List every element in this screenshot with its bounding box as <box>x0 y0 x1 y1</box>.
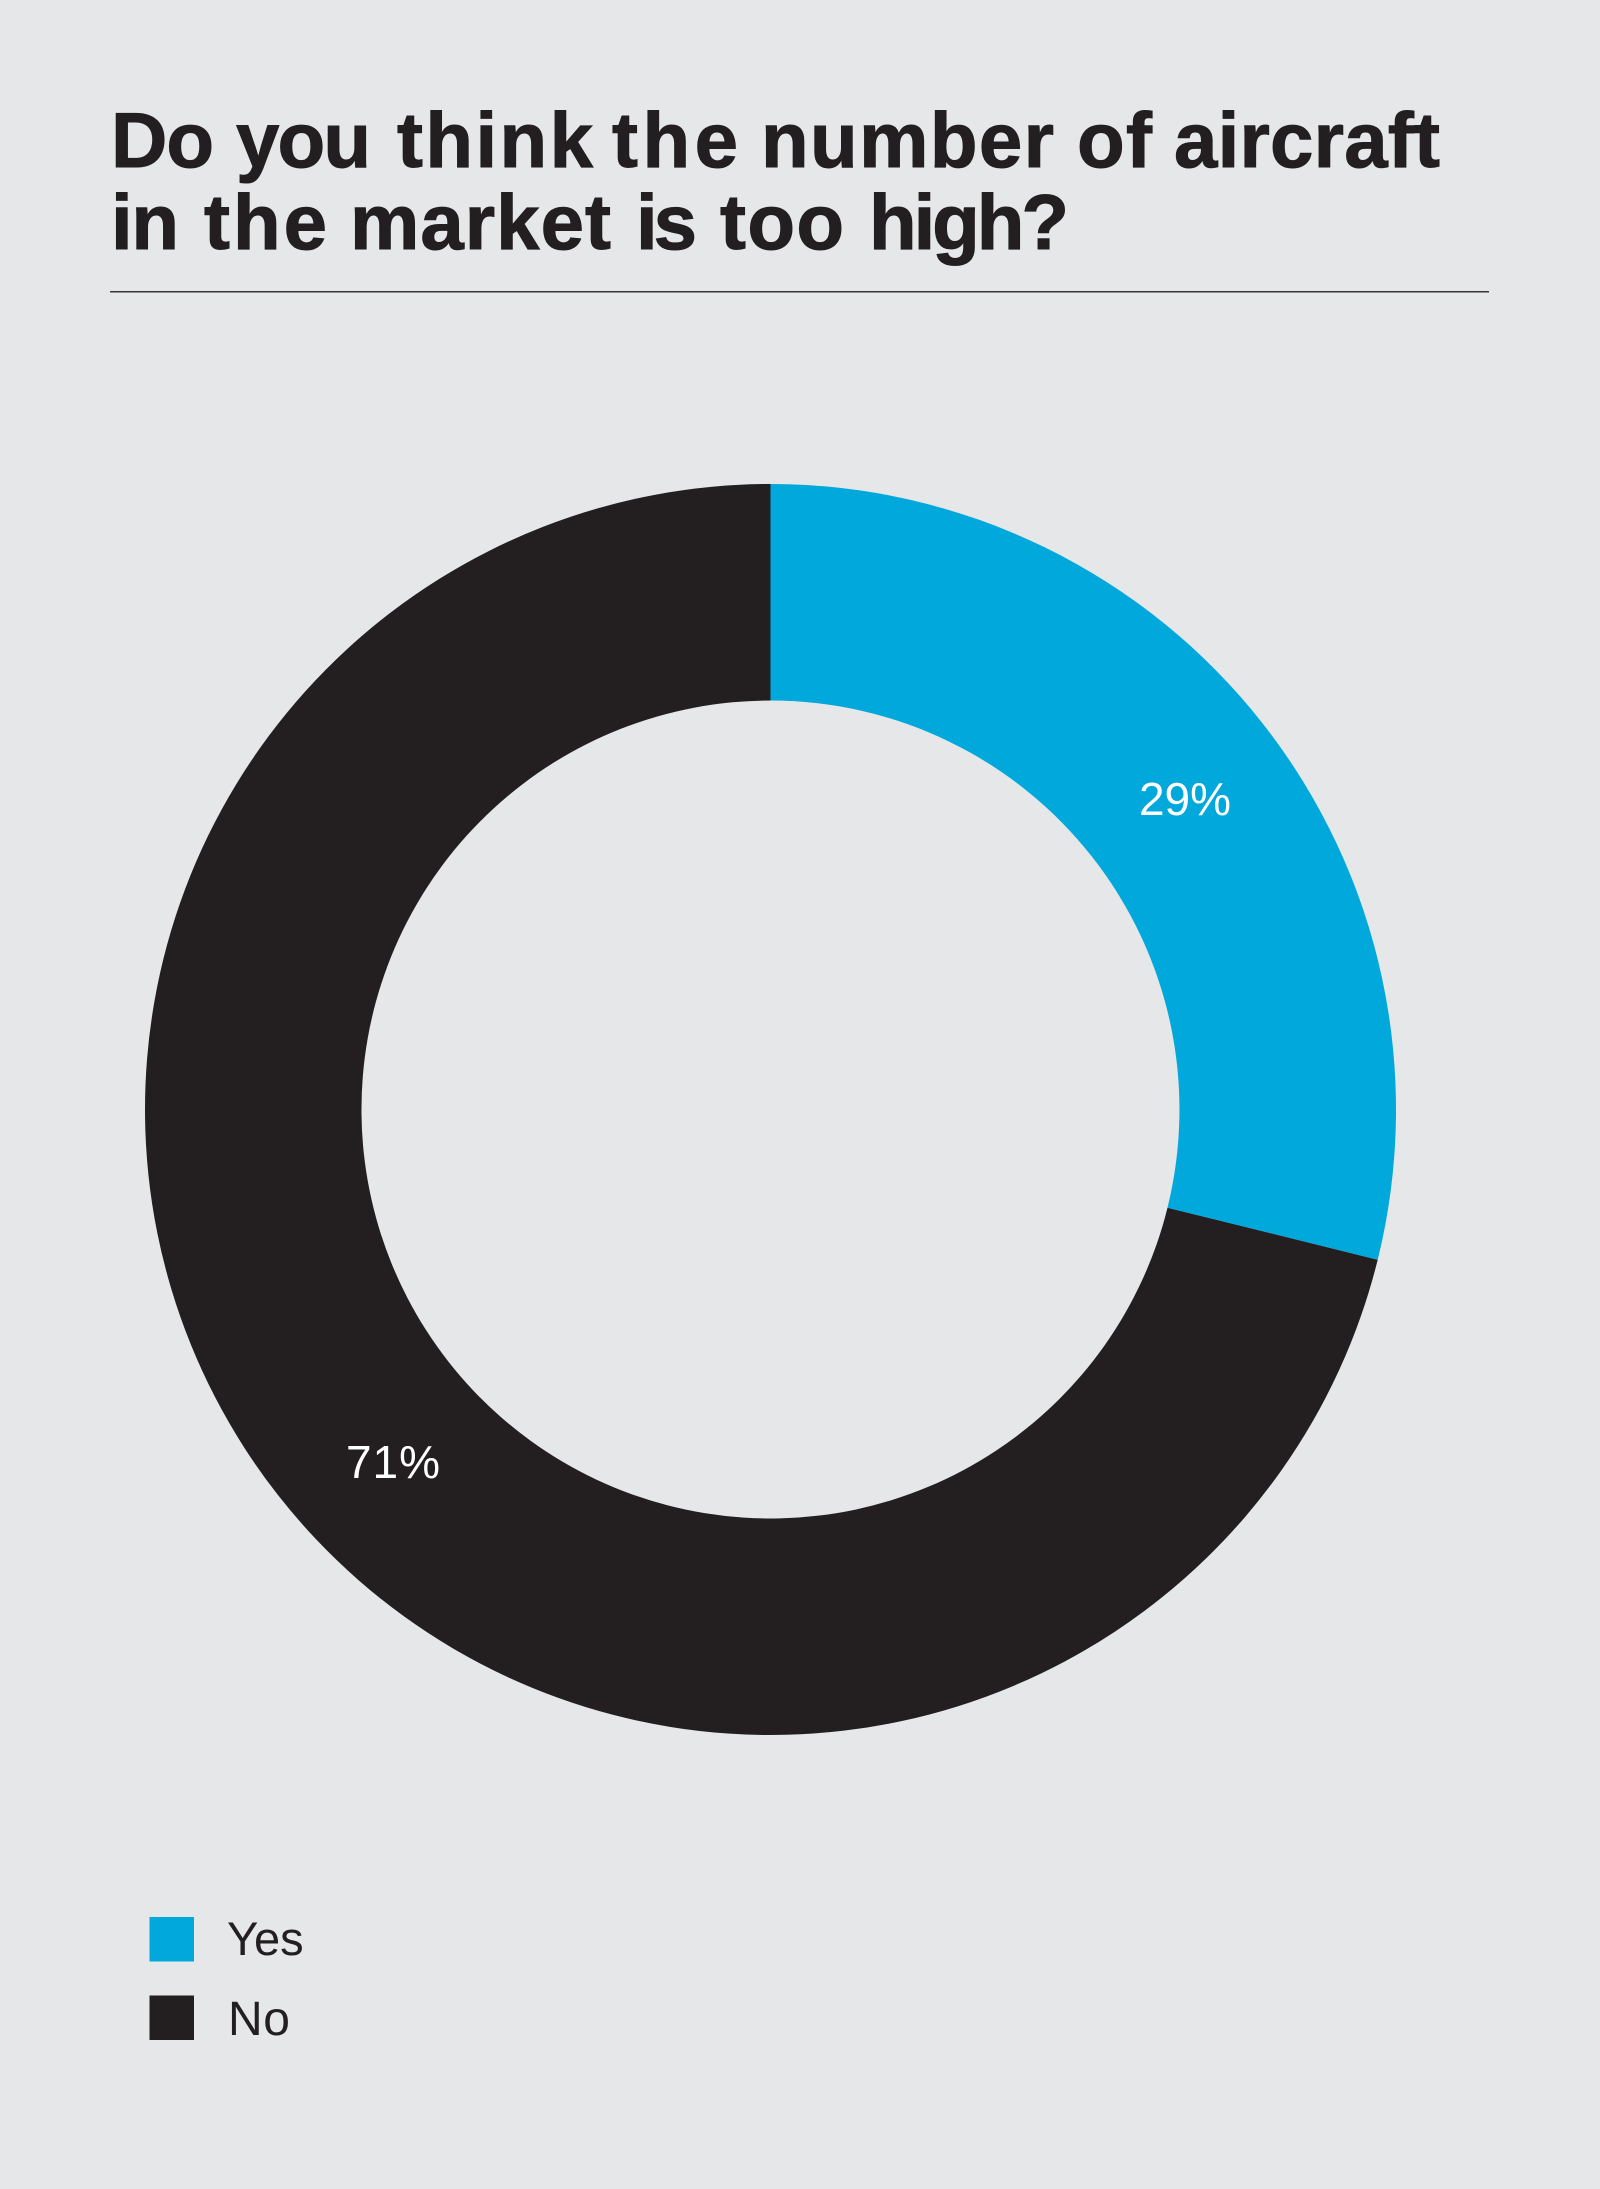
segment: Yes 29% <box>770 484 1396 1260</box>
title: you <box>236 96 371 184</box>
label: 71%: 71% <box>346 1436 440 1488</box>
title: of <box>1077 96 1153 184</box>
segment: No 71% <box>145 484 1378 1735</box>
title: number <box>761 96 1054 184</box>
title: market <box>350 178 611 266</box>
title: the <box>204 178 327 266</box>
title: too <box>720 178 844 266</box>
legend <box>150 1912 304 2046</box>
title: think <box>397 96 594 184</box>
title: the <box>612 96 738 184</box>
title: Do <box>111 96 214 184</box>
legend item: No: No <box>228 1993 290 2046</box>
title: is <box>636 178 697 266</box>
legend item: Yes <box>150 1912 304 1965</box>
title <box>111 96 1440 266</box>
label: 29%: 29% <box>1139 773 1231 825</box>
legend item: No <box>150 1993 290 2046</box>
legend item: Yes: Yes <box>227 1912 304 1965</box>
title: high? <box>869 178 1069 266</box>
title: in <box>111 178 179 266</box>
title: aircraft <box>1174 96 1440 184</box>
donut chart <box>145 484 1396 1735</box>
